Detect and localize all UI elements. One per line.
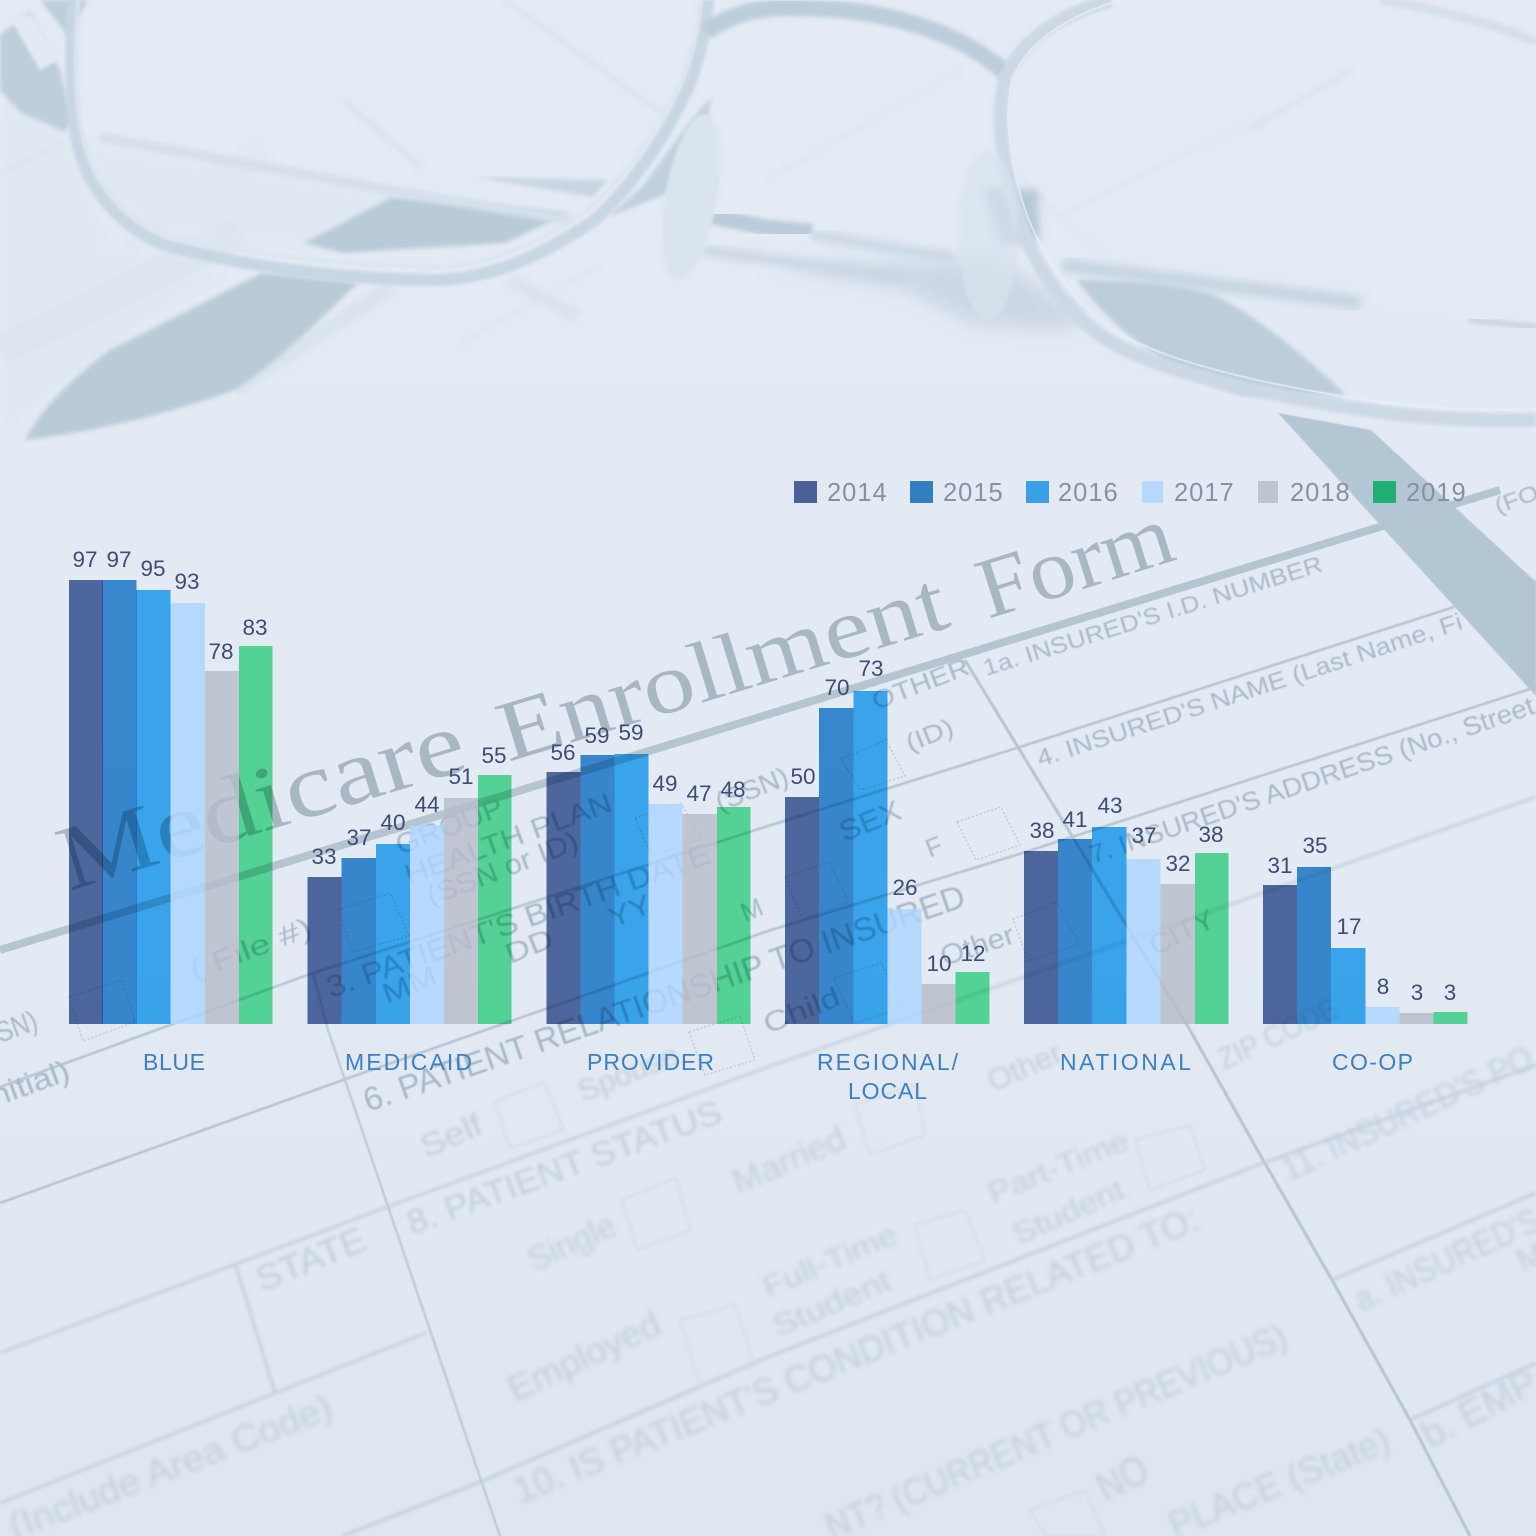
background: form field labels: (FO <box>1491 480 1536 519</box>
bar group: Blue: 95 <box>140 556 166 581</box>
bar group: Medicaid <box>308 743 512 1075</box>
legend item: 2016 <box>1026 479 1119 507</box>
background: form field labels: M <box>736 892 767 928</box>
bar group: Medicaid: 40 <box>380 810 406 835</box>
category label: Medicaid: MEDICAID <box>345 1049 472 1075</box>
background: blurred lower form labels <box>250 992 1343 1299</box>
bar group: Co-op: 31 <box>1267 853 1293 878</box>
background: blurred lower form labels: Other <box>982 1037 1067 1098</box>
background: pens and shadows <box>25 97 1536 696</box>
bar group: National: 32 <box>1165 851 1191 876</box>
background: enrollment form photo: Student <box>1007 1173 1130 1251</box>
category label: Co-op: CO-OP <box>1332 1049 1413 1075</box>
bar group: Regional/Local: 12 <box>960 941 986 966</box>
background: blurred lower form labels: STATE <box>250 1220 372 1299</box>
bar group: Blue: 83 <box>242 615 268 640</box>
bar group: Blue <box>69 547 272 1075</box>
category label: Regional/Local: REGIONAL/ <box>817 1049 959 1075</box>
background: form field labels: CITY <box>1144 903 1220 961</box>
background: enrollment form photo: Employed <box>501 1303 667 1409</box>
bar group: Medicaid: 33 <box>311 844 337 869</box>
bar group: Regional/Local: 26 <box>892 875 918 900</box>
category label: Blue: BLUE <box>143 1049 205 1075</box>
background: form field labels: (SSN or ID) <box>422 825 583 912</box>
background: check boxes <box>69 740 1205 1536</box>
category label: Provider: PROVIDER <box>587 1049 714 1075</box>
bar group: Blue: 93 <box>174 569 200 594</box>
background: form field labels: F <box>921 830 947 864</box>
background: enrollment form photo: Student <box>768 1264 897 1343</box>
bar group: Regional/Local: 50 <box>790 764 816 789</box>
bar group: Co-op <box>1263 833 1468 1075</box>
background: enrollment form photo: Married <box>726 1119 852 1201</box>
bar group: Provider: 49 <box>652 771 678 796</box>
bar group: Medicaid: 51 <box>448 764 474 789</box>
background: form title: Medicare <box>45 690 476 910</box>
legend item: 2019 <box>1373 479 1467 507</box>
background: form field labels: (ID) <box>902 713 958 758</box>
background: form title: Enrollment <box>485 552 958 780</box>
background: enrollment form photo: Part-Time <box>983 1124 1134 1210</box>
bar group: Regional/Local: 73 <box>858 656 884 681</box>
background: form field labels: YY <box>604 888 656 934</box>
legend item: 2014: 2014 <box>827 479 888 507</box>
background: form field labels: 4. INSURED'S NAME (Last Name, Fi <box>1033 608 1466 773</box>
bar group: Medicaid: 55 <box>481 743 507 768</box>
bar group: Provider: 47 <box>686 781 712 806</box>
legend item: 2019: 2019 <box>1406 479 1467 507</box>
background: form field labels: Other <box>936 919 1018 972</box>
bar group: Provider: 48 <box>720 777 746 802</box>
background: blurred lower form labels: Self <box>415 1106 488 1164</box>
bar group: Medicaid: 44 <box>414 792 440 817</box>
bar group: National <box>1024 793 1228 1075</box>
legend item: 2015: 2015 <box>943 479 1004 507</box>
bar group: Blue: 78 <box>208 639 234 664</box>
legend item: 2016: 2016 <box>1058 479 1119 507</box>
bar group: Provider: 59 <box>584 723 610 748</box>
bar group: National: 37 <box>1131 823 1157 848</box>
bar group: Co-op: 3 <box>1444 980 1456 1005</box>
legend <box>794 479 1467 507</box>
background: form field labels: (SSN) <box>711 761 793 818</box>
bar group: Co-op: 35 <box>1302 833 1328 858</box>
background: soft page tones behind glasses <box>0 90 1536 440</box>
bar group: National: 41 <box>1062 807 1088 832</box>
legend item: 2018 <box>1258 479 1351 507</box>
background: enrollment form photo: 10. IS PATIENT'S CONDITION RELATED TO: <box>508 1198 1204 1511</box>
legend item: 2017 <box>1142 479 1235 507</box>
background: form field labels <box>0 480 1536 1119</box>
bar group: National: 38 <box>1198 822 1224 847</box>
background: form field labels: OTHER <box>868 653 973 716</box>
bar chart <box>69 547 1468 1104</box>
legend item: 2018: 2018 <box>1290 479 1351 507</box>
legend item: 2014 <box>794 479 888 507</box>
bar group: Provider: 56 <box>550 740 576 765</box>
background: faint page lines through lenses <box>0 0 1350 390</box>
background: form field labels: DD <box>501 922 558 970</box>
bar group: Provider <box>546 720 750 1075</box>
background: enrollment form photo: Full-Time <box>758 1218 902 1304</box>
bar group: Co-op: 3 <box>1411 980 1423 1005</box>
background: blurred lower form labels: ZIP CODE <box>1213 992 1343 1076</box>
category label: Regional/Local: LOCAL <box>848 1078 927 1104</box>
background: form field labels: 3. PATIENT'S BIRTH DATE <box>322 838 715 1005</box>
background: form field labels: 6. PATIENT RELATIONSHIP TO INSURED <box>358 877 970 1119</box>
category label: National: NATIONAL <box>1060 1049 1191 1075</box>
bar group: Provider: 59 <box>618 720 644 745</box>
bar group: Co-op: 8 <box>1377 974 1389 999</box>
bar group: National: 38 <box>1029 818 1055 843</box>
bar group: Regional/Local: 70 <box>824 675 850 700</box>
bar group: Regional/Local <box>785 656 990 1104</box>
background: form field labels: 7. INSURED'S ADDRESS (No., Street <box>1085 690 1536 870</box>
background: form field labels: SEX <box>835 795 906 848</box>
bar group: Blue: 97 <box>72 547 98 572</box>
bar group: Co-op: 17 <box>1336 914 1362 939</box>
background: enrollment form photo: NO <box>1088 1445 1156 1511</box>
background: form field labels: ( File #) <box>185 912 316 986</box>
background: blurred lower form labels: 8. PATIENT STATUS <box>402 1093 727 1243</box>
bar group: Regional/Local: 10 <box>926 951 952 976</box>
background: form field labels: GROUP <box>391 791 508 861</box>
legend item: 2017: 2017 <box>1174 479 1235 507</box>
background: form rules <box>0 490 1536 1536</box>
legend item: 2015 <box>910 479 1004 507</box>
background: form field labels: MM <box>378 960 441 1010</box>
background: enrollment form photo: Single <box>522 1206 622 1279</box>
background: form title: Form <box>965 485 1184 637</box>
background: form field labels: HEALTH PLAN <box>400 787 616 891</box>
bar group: National: 43 <box>1097 793 1123 818</box>
background: form field labels: Child <box>759 981 844 1040</box>
bar group: Medicaid: 37 <box>346 825 372 850</box>
background: glasses <box>0 0 1536 420</box>
background: form field labels: 1a. INSURED'S I.D. NUMBER <box>980 551 1325 681</box>
background: form title <box>45 485 1184 910</box>
bar group: Blue: 97 <box>106 547 132 572</box>
background: blurred lower form labels: Spouse <box>573 1039 683 1108</box>
